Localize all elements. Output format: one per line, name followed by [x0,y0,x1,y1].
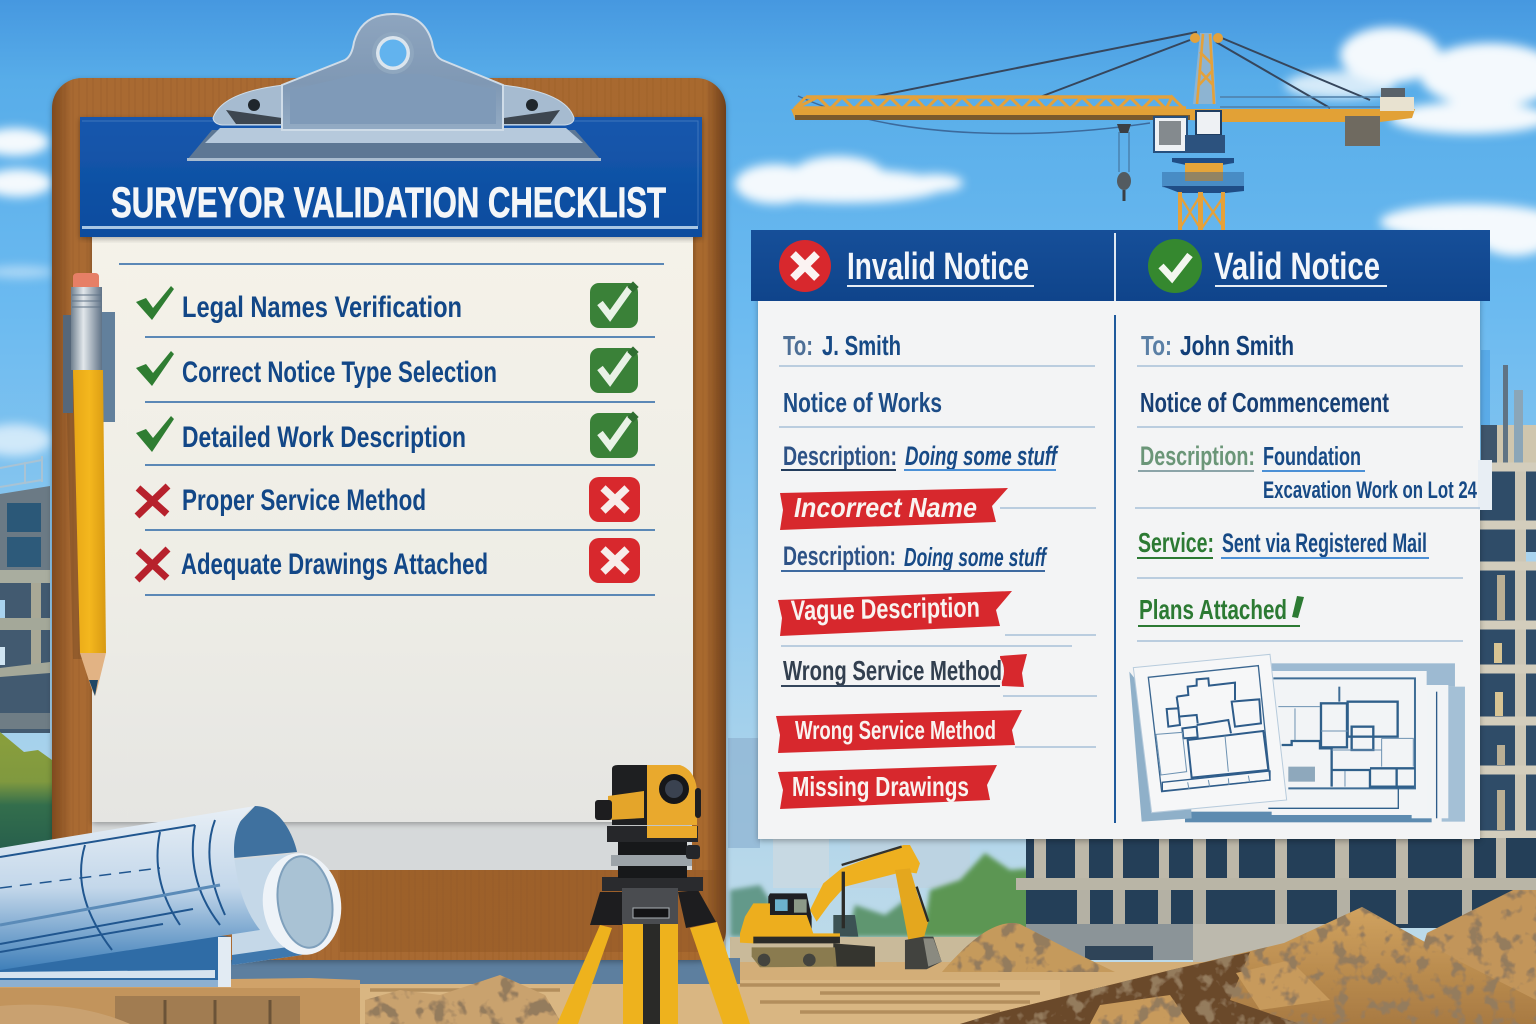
valid description [1138,441,1477,504]
stamp: vague description [778,591,1012,636]
valid recipient [1141,330,1294,361]
stamp: incorrect name [780,488,1008,530]
invalid recipient: J. Smith [822,330,901,361]
crane [791,32,1415,230]
valid service: Service: [1138,527,1214,558]
excavator [740,845,942,969]
foreground brick foundation [0,978,360,1024]
blueprint rolls [0,806,348,987]
valid column [1129,330,1480,822]
invalid heading: Invalid Notice [847,246,1029,288]
invalid description 1: Doing some stuff [905,441,1059,471]
invalid recipient: To: [783,330,813,361]
checklist item: drawings [137,538,640,583]
valid service [1137,527,1429,558]
stamp: wrong service method [776,710,1022,753]
invalid recipient [783,330,901,361]
notice of commencement: Notice of Commencement [1140,387,1389,418]
checklist item: work description [136,411,639,458]
right tower building [1480,350,1536,850]
pencil [63,273,115,696]
invalid column [776,330,1097,809]
checklist item: drawings: Adequate Drawings Attached [181,548,488,581]
distant pale buildings [728,738,970,888]
clipboard board [52,78,726,960]
stamp: wrong service method: Wrong Service Method [795,715,996,745]
distant trees [730,853,1035,937]
wrong service method: Wrong Service Method [783,655,1002,686]
valid service: Sent via Registered Mail [1222,528,1427,558]
ground [0,937,1536,1024]
invalid description 2 [781,541,1048,572]
stamp: incorrect name: Incorrect Name [794,492,977,523]
title: SURVEYOR VALIDATION CHECKLIST [111,179,666,227]
floor plan drawings [1129,654,1465,822]
checklist item: notice type: Correct Notice Type Selection [182,356,497,389]
stamp: vague description: Vague Description [791,592,980,626]
clouds [0,27,1536,456]
stamp: missing drawings: Missing Drawings [792,771,969,802]
left trees [0,732,52,850]
invalid description 2: Description: [783,541,896,571]
valid recipient: John Smith [1180,330,1294,361]
total station on tripod [557,765,750,1024]
checklist item: work description: Detailed Work Description [182,421,466,454]
checklist rules [119,264,664,595]
invalid description 1: Description: [783,441,897,471]
icon: red x badge [779,240,831,292]
checklist item: service method [137,477,640,522]
checklist item: notice type [136,346,639,393]
checklist paper [92,230,693,822]
blue strip below clipboard [230,958,740,984]
checklist item: legal names [136,281,639,328]
valid description: Foundation [1263,441,1361,471]
valid rule lines [1135,366,1480,641]
valid heading: Valid Notice [1214,246,1380,288]
icon: green check badge [1148,239,1202,293]
notice panel header [751,230,1490,301]
stamp: missing drawings [778,765,997,809]
left background building [0,456,50,733]
notice panel body [758,290,1492,839]
notice of works: Notice of Works [783,387,942,418]
ground dirt small pile [365,975,562,1024]
foreground dirt piles [960,890,1536,1024]
invalid description 1 [781,441,1059,471]
dirt pile by excavator [942,923,1115,972]
checklist item: service method: Proper Service Method [182,484,426,517]
checklist item: legal names: Legal Names Verification [182,291,462,324]
clipboard metal clip [187,14,601,161]
center divider [1114,315,1116,823]
invalid description 2: Doing some stuff [904,542,1048,572]
valid description: Description: [1140,441,1255,471]
invalid rule lines [779,366,1097,747]
clipboard lower paper sheet [92,820,692,870]
checklist header banner [80,117,702,237]
lower concrete building [1016,838,1536,964]
plans attached: Plans Attached [1139,594,1287,625]
valid recipient: To: [1141,330,1172,361]
